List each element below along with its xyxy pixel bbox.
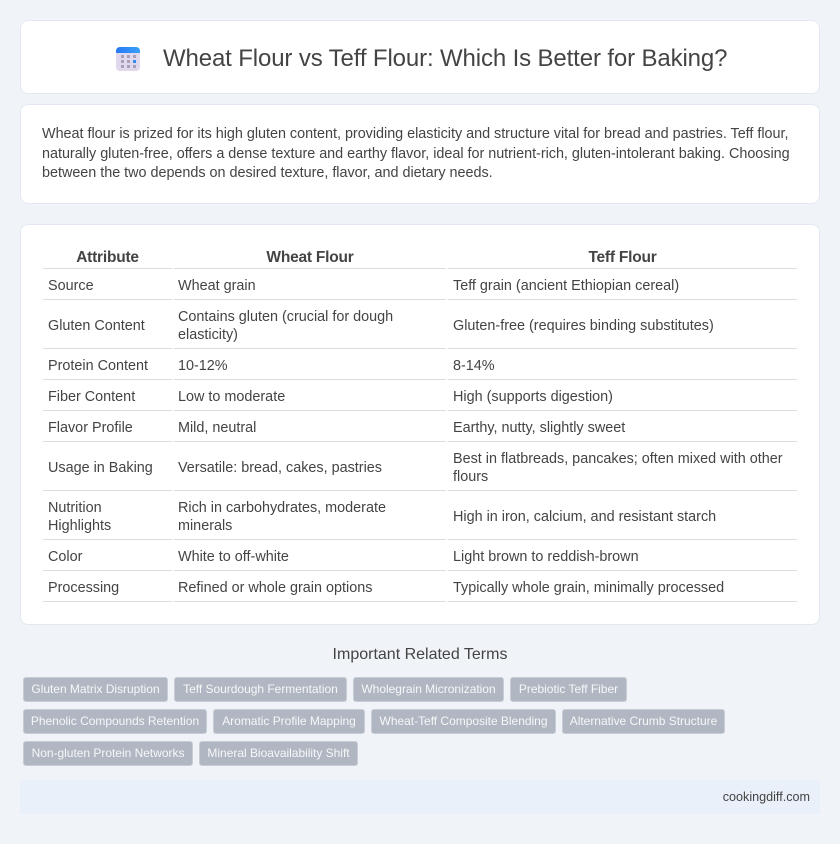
comparison table card xyxy=(20,224,820,625)
row: source: Wheat grain xyxy=(178,278,256,294)
row: nutrition highlights: Rich in carbohydrates, moderate xyxy=(178,500,386,516)
row: gluten content: Gluten-free (requires binding substitutes) xyxy=(453,318,714,334)
intro paragraph: Wheat flour is prized for its high gluten content, providing elasticity and structure vital for bread and pastries. Teff flour, xyxy=(42,126,788,142)
related terms tags: Aromatic Profile Mapping xyxy=(222,714,356,728)
related terms tags: Teff Sourdough Fermentation xyxy=(183,682,338,696)
row: source: Source xyxy=(48,278,94,294)
row: processing: Refined or whole grain options xyxy=(178,580,372,596)
row: usage in baking: Best in flatbreads, pancakes; often mixed with other xyxy=(453,451,783,467)
row: nutrition highlights: minerals xyxy=(178,518,232,534)
row: flavor profile: Earthy, nutty, slightly sweet xyxy=(453,420,625,436)
related terms heading: Important Related Terms xyxy=(333,646,507,663)
table header: Wheat Flour xyxy=(266,249,354,266)
footer bar xyxy=(20,780,820,814)
table header xyxy=(43,249,797,269)
row: nutrition highlights: Highlights xyxy=(48,518,111,534)
comparison table xyxy=(43,249,797,602)
row: protein content: Protein Content xyxy=(48,358,148,374)
related terms tags: Phenolic Compounds Retention xyxy=(31,714,199,728)
row: flavor profile: Mild, neutral xyxy=(178,420,256,436)
row: fiber content: High (supports digestion) xyxy=(453,389,613,405)
row: color: Light brown to reddish-brown xyxy=(453,549,639,565)
footer source: cookingdiff.com xyxy=(723,790,810,804)
related terms tags: Non-gluten Protein Networks xyxy=(32,746,184,760)
row: gluten content: Contains gluten (crucial for dough xyxy=(178,309,393,325)
intro paragraph: between the two depends on desired texture, flavor, and dietary needs. xyxy=(42,165,493,181)
related terms tags: Alternative Crumb Structure xyxy=(570,714,717,728)
related terms tags: Prebiotic Teff Fiber xyxy=(519,682,618,696)
row: fiber content: Low to moderate xyxy=(178,389,285,405)
row: fiber content: Fiber Content xyxy=(48,389,135,405)
title: Wheat Flour vs Teff Flour: Which Is Better for Baking? xyxy=(163,45,727,72)
row: color xyxy=(43,549,797,571)
row: flavor profile: Flavor Profile xyxy=(48,420,133,436)
title card xyxy=(20,20,820,94)
row: source xyxy=(43,278,797,300)
row: usage in baking: flours xyxy=(453,469,488,485)
table header: Teff Flour xyxy=(588,249,657,266)
row: color: Color xyxy=(48,549,82,565)
row: processing xyxy=(43,580,797,602)
related terms tags: Wholegrain Micronization xyxy=(361,682,496,696)
related terms tags: Mineral Bioavailability Shift xyxy=(207,746,350,760)
row: nutrition highlights: Nutrition xyxy=(48,500,102,516)
icon: calendar xyxy=(116,47,140,71)
row: gluten content xyxy=(43,309,797,349)
row: fiber content xyxy=(43,389,797,411)
row: processing: Typically whole grain, minimally processed xyxy=(453,580,724,596)
intro text card xyxy=(20,104,820,204)
row: flavor profile xyxy=(43,420,797,442)
related terms tags xyxy=(23,677,725,766)
row: protein content xyxy=(43,358,797,380)
row: usage in baking: Versatile: bread, cakes, pastries xyxy=(178,460,382,476)
row: nutrition highlights: High in iron, calcium, and resistant starch xyxy=(453,509,716,525)
row: protein content: 10-12% xyxy=(178,358,228,374)
row: nutrition highlights xyxy=(43,500,797,540)
row: processing: Processing xyxy=(48,580,119,596)
row: protein content: 8-14% xyxy=(453,358,495,374)
intro paragraph xyxy=(42,126,790,181)
row: source: Teff grain (ancient Ethiopian cereal) xyxy=(453,278,679,294)
row: color: White to off-white xyxy=(178,549,289,565)
related terms tags: Gluten Matrix Disruption xyxy=(31,682,160,696)
related terms tags: Wheat-Teff Composite Blending xyxy=(380,714,547,728)
row: gluten content: Gluten Content xyxy=(48,318,145,334)
table header: Attribute xyxy=(76,249,139,266)
row: gluten content: elasticity) xyxy=(178,327,238,343)
row: usage in baking: Usage in Baking xyxy=(48,460,153,476)
intro paragraph: naturally gluten-free, offers a dense texture and earthy flavor, ideal for nutrient-rich, gluten-intolerant baking. Choosing xyxy=(42,146,790,162)
row: usage in baking xyxy=(43,451,797,491)
